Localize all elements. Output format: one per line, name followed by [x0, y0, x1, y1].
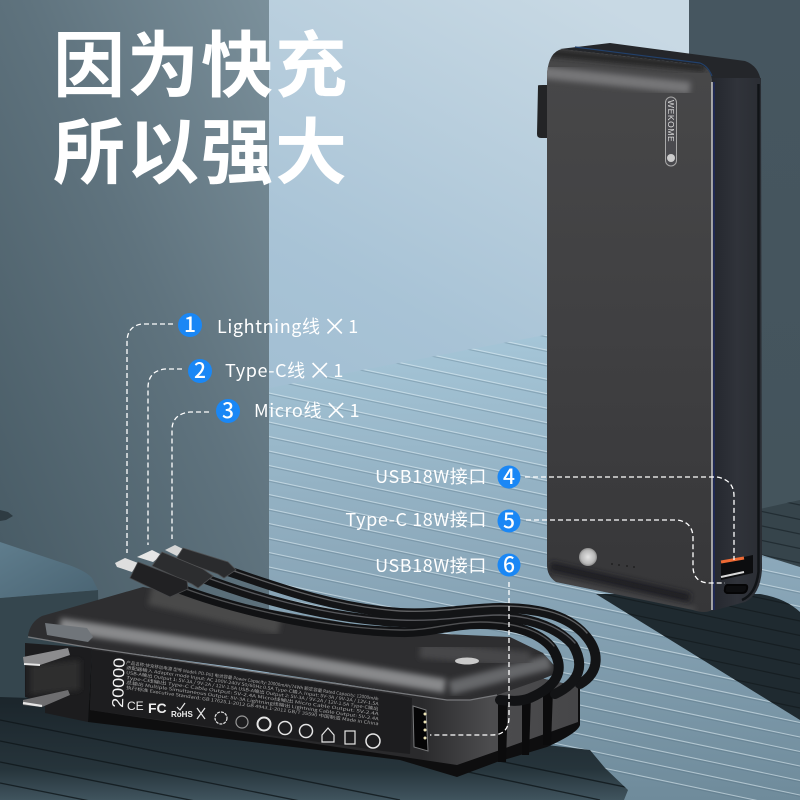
callout 3: Micro cable: 3 [222, 395, 234, 425]
Type-C port [725, 585, 747, 593]
power button [455, 658, 479, 664]
body front [90, 648, 578, 765]
side face [712, 78, 762, 611]
body base [88, 648, 580, 777]
certification icons: CE [127, 699, 144, 713]
lower power bank [23, 545, 596, 777]
callout 5: Type-C 18W port: 5 [503, 505, 515, 535]
callout 4: USB 18W port: 4 [503, 461, 515, 491]
top face [560, 43, 761, 82]
callout 4: USB 18W port: USB18W接口 [375, 463, 487, 489]
edge trims [711, 82, 713, 610]
callout 1: Lightning cable: × [323, 307, 347, 342]
callout 2: Type-C cable: 2 [194, 355, 206, 385]
three retractable cables [178, 568, 596, 701]
connector heads [115, 545, 236, 597]
background: striped floor [269, 335, 800, 800]
spec text [126, 659, 380, 727]
power button [579, 548, 597, 566]
certification icons: FC [148, 700, 167, 716]
capacity mark: 20000 [110, 657, 129, 708]
top face [28, 587, 560, 700]
brand logo pill [666, 97, 676, 166]
callout 1: Lightning cable [127, 307, 359, 553]
folding plug tab [537, 85, 548, 138]
callout 2: Type-C cable [148, 351, 344, 545]
title [53, 7, 349, 199]
certification icons: RoHS [171, 710, 193, 719]
callout 5: Type-C 18W port [345, 505, 725, 583]
spec text: 总输出 Multiple Simultaneous Output: 5V-3A Lightning线输出 Lightning Cable Output: 5V-2.4A [126, 679, 380, 722]
title: 所以强大 [53, 94, 349, 199]
spec text: 产品名称:快充移动电源 型号 Model: PD-P63 电池容量 Power Capacity: 20000mAh/74Wh 额定容量 Rated Capacity: 12000mAh [126, 659, 379, 702]
spec text: Type-C线输出 Type-C Cable Output: 5V-2.4A Micro线输出 Micro Cable Output: 5V-2.4A [126, 674, 380, 717]
title: 因为快充 [53, 7, 349, 112]
spec text: USB-A输出 Output 1: 5V-3A / 9V-2A / 12V-1.5A USB-A输出 Output 2: 5V-3A / 9V-2A / 12V-1.5A Type-C输出 [126, 669, 379, 712]
label panel [90, 650, 412, 754]
brand logo pill: WEKOME [666, 100, 676, 142]
retaining straps [498, 690, 553, 762]
callout 2: Type-C cable: Type-C线 [225, 357, 306, 383]
certification icons [127, 699, 380, 748]
folding plug [23, 643, 92, 722]
indicator dots [611, 563, 635, 568]
callout 2: Type-C cable: 1 [333, 357, 344, 383]
callout 2: Type-C cable: × [308, 351, 332, 386]
slide tab [45, 623, 93, 642]
callout 3: Micro cable: Micro线 [254, 397, 322, 423]
dark table surface [0, 697, 640, 800]
spec text: 适配器输入 Adapter mode Input: AC 100V-240V 50/60Hz 0.5A Type-C输入 Input: 5V-3A / 9V-2A / 12V-1.5A [126, 664, 379, 707]
background: dark left wall [0, 0, 269, 625]
callout 6: USB 18W port: 6 [503, 549, 515, 579]
shadow under upright power bank [596, 594, 800, 720]
callout 3: Micro cable: 1 [350, 397, 360, 423]
callout 3: Micro cable: × [324, 391, 349, 426]
upright power bank [537, 40, 762, 620]
callout 4: USB 18W port [375, 461, 734, 560]
callout 5: Type-C 18W port: Type-C 18W接口 [345, 506, 487, 532]
background: dark right wall [689, 0, 800, 567]
callout 1: Lightning cable: 1 [348, 313, 359, 339]
callout 6: USB 18W port [375, 549, 520, 735]
left blue object [0, 510, 100, 700]
callout 1: Lightning cable: 1 [184, 309, 196, 339]
USB port [413, 706, 428, 751]
USB port [721, 555, 753, 580]
callout 6: USB 18W port: USB18W接口 [375, 552, 487, 578]
callout 1: Lightning cable: Lightning线 [217, 313, 321, 339]
front face [540, 40, 715, 620]
spec text: 执行标准 Executive Standard: GB 17625.1-2012 GB 4943.1-2011 GB/T 35590 中国制造 Made in China [126, 684, 380, 727]
callout 3: Micro cable [172, 391, 360, 539]
